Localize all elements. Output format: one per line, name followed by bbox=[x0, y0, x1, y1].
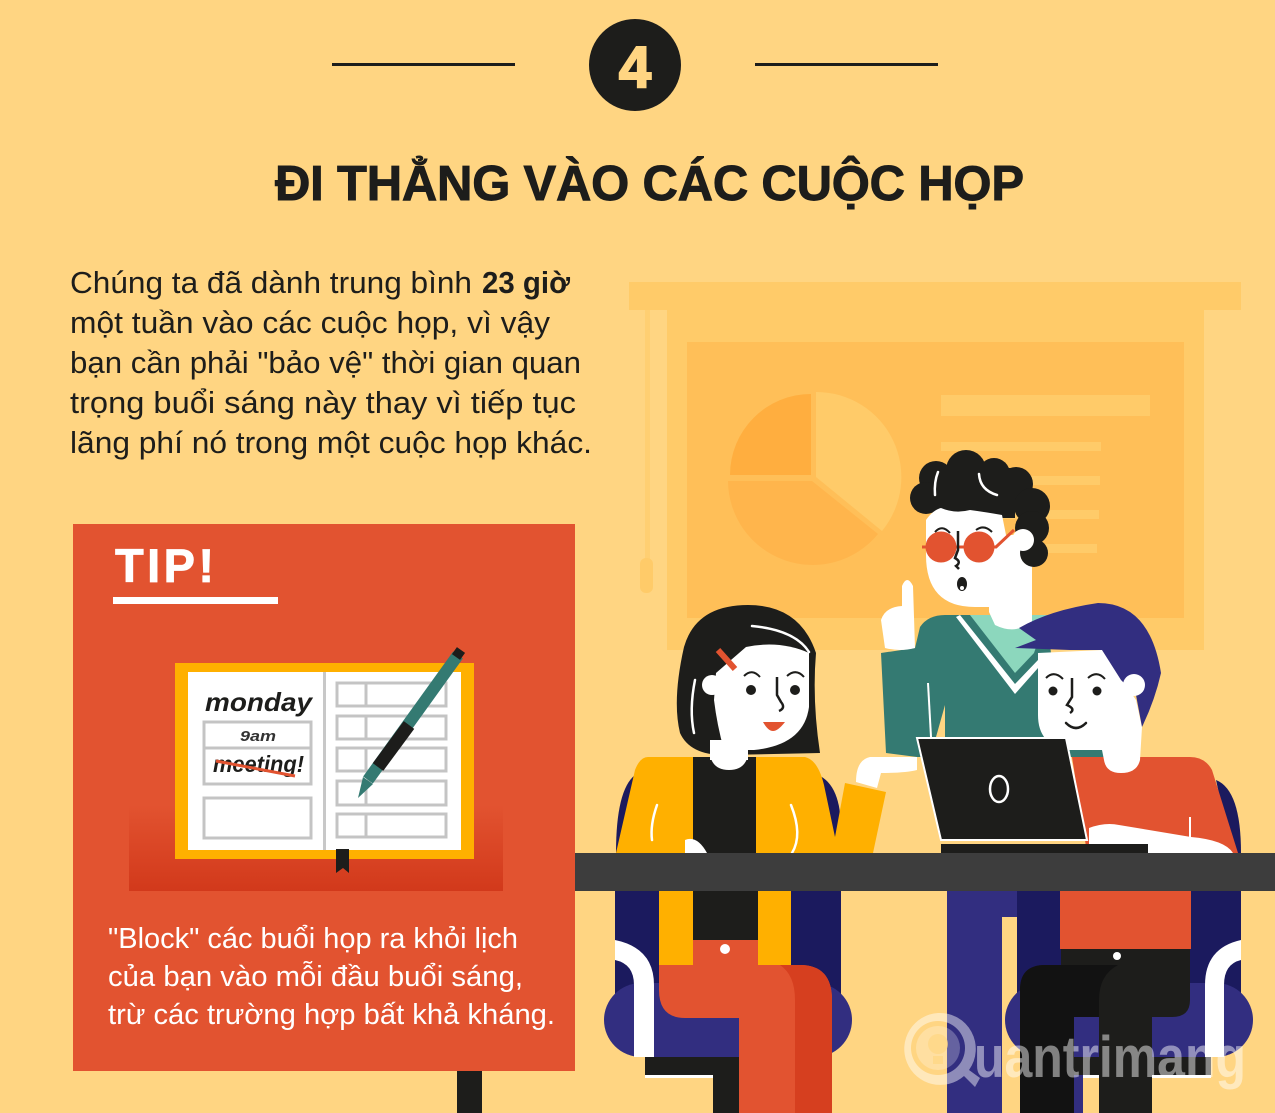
pen bbox=[358, 650, 461, 798]
laptop bbox=[917, 738, 1148, 853]
intro text block: trọng buổi sáng này thay vì tiếp tục bbox=[70, 385, 576, 420]
text lines on board bbox=[941, 395, 1150, 553]
tip heading: TIP! bbox=[115, 539, 214, 592]
watermark logo bbox=[904, 1013, 980, 1087]
chairs bbox=[604, 775, 1253, 1113]
intro text block: một tuần vào các cuộc họp, vì vậy bbox=[70, 305, 551, 340]
man with curly hair bbox=[881, 450, 1110, 757]
intro text block: bạn cần phải "bảo vệ" thời gian quan bbox=[70, 345, 581, 380]
icon: planner notebook: meeting! bbox=[213, 751, 304, 777]
title: ĐI THẲNG VÀO CÁC CUỘC HỌP bbox=[275, 156, 1024, 211]
tip heading bbox=[113, 539, 278, 604]
woman lower body bbox=[659, 891, 832, 1113]
icon: planner notebook bbox=[129, 650, 503, 891]
table bbox=[575, 853, 1275, 891]
number badge with side rules bbox=[332, 19, 938, 111]
man lower body bbox=[1020, 891, 1191, 1113]
tip text: "Block" các buổi họp ra khỏi lịch bbox=[108, 923, 518, 955]
icon: planner notebook: monday bbox=[205, 687, 314, 717]
tip panel bbox=[73, 524, 575, 1113]
illustration: three people at a meeting table bbox=[575, 450, 1275, 1113]
intro text block bbox=[70, 265, 592, 460]
watermark bbox=[904, 1013, 1246, 1090]
icon: planner notebook: 9am bbox=[240, 728, 276, 745]
presentation board background bbox=[629, 282, 1241, 650]
intro text block: Chúng ta đã dành trung bình bbox=[70, 265, 472, 300]
tip text: của bạn vào mỗi đầu buổi sáng, bbox=[108, 960, 523, 993]
tip text: trừ các trường hợp bất khả kháng. bbox=[108, 999, 555, 1031]
number badge with side rules: 4 bbox=[619, 35, 651, 100]
woman with black bob bbox=[616, 605, 917, 1113]
pie chart on board bbox=[728, 392, 901, 565]
man with blue hair bbox=[947, 603, 1238, 1113]
intro text block: 23 giờ bbox=[482, 265, 571, 300]
intro text block: lãng phí nó trong một cuộc họp khác. bbox=[70, 425, 592, 460]
tip text bbox=[108, 923, 555, 1031]
